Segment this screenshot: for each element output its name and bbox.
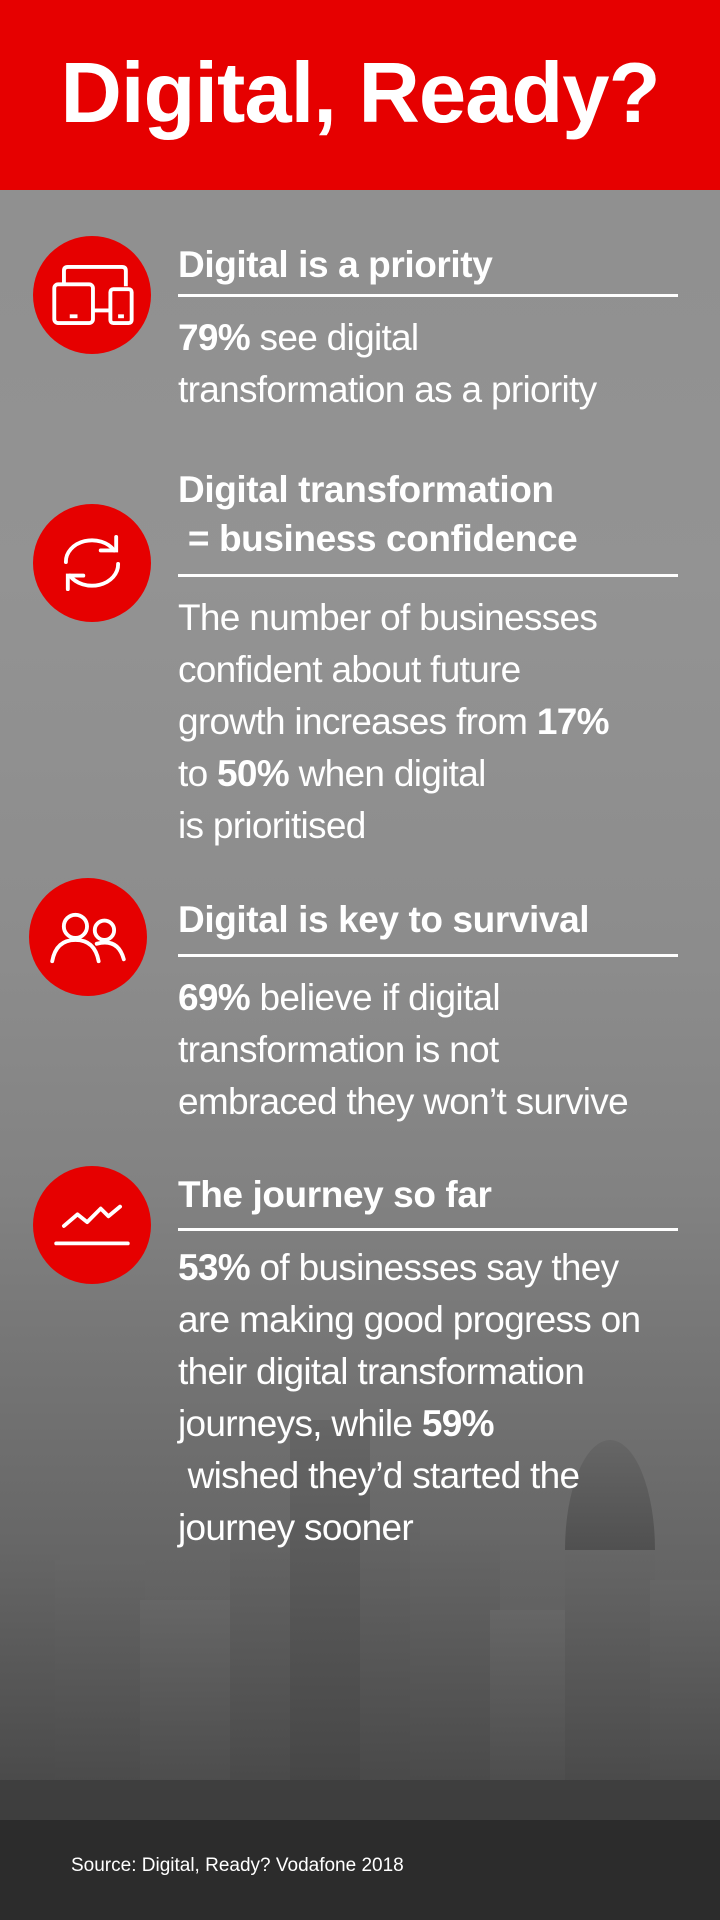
body 4: are making good progress on [178,1299,640,1340]
city skyline [0,1420,720,1920]
body 1: transformation as a priority [178,369,596,410]
icon: refresh [33,504,151,622]
heading 2: = business confidence [188,518,577,559]
body 4: their digital transformation [178,1351,584,1392]
body 2: The number of businesses [178,597,597,638]
heading 4: The journey so far [178,1174,492,1215]
title: Digital, Ready? [60,46,660,141]
body 4: wished they’d started the [188,1455,579,1496]
header [0,0,720,190]
body 4: journeys, while 59% [178,1403,494,1444]
body 3: transformation is not [178,1029,499,1070]
heading 3: Digital is key to survival [178,899,589,940]
heading 2: Digital transformation [178,469,554,510]
body 4: journey sooner [178,1507,413,1548]
body 2: is prioritised [178,805,366,846]
body 1 [178,317,597,410]
body 3 [178,977,628,1122]
body 2 [178,597,609,846]
body 2: confident about future [178,649,521,690]
body 3: 69% believe if digital [178,977,500,1018]
body 4 [177,1247,640,1548]
body 2: to 50% when digital [178,753,486,794]
heading 2 [178,469,577,559]
body 3: embraced they won’t survive [178,1081,628,1122]
icon: growth chart [33,1166,151,1284]
icon: devices [33,236,151,354]
source: Source: Digital, Ready? Vodafone 2018 [71,1855,404,1876]
icon: people [29,878,147,996]
heading 1: Digital is a priority [178,244,492,285]
body 1: 79% see digital [178,317,418,358]
body 2: growth increases from 17% [178,701,609,742]
body 4: 53% of businesses say they [178,1247,618,1288]
